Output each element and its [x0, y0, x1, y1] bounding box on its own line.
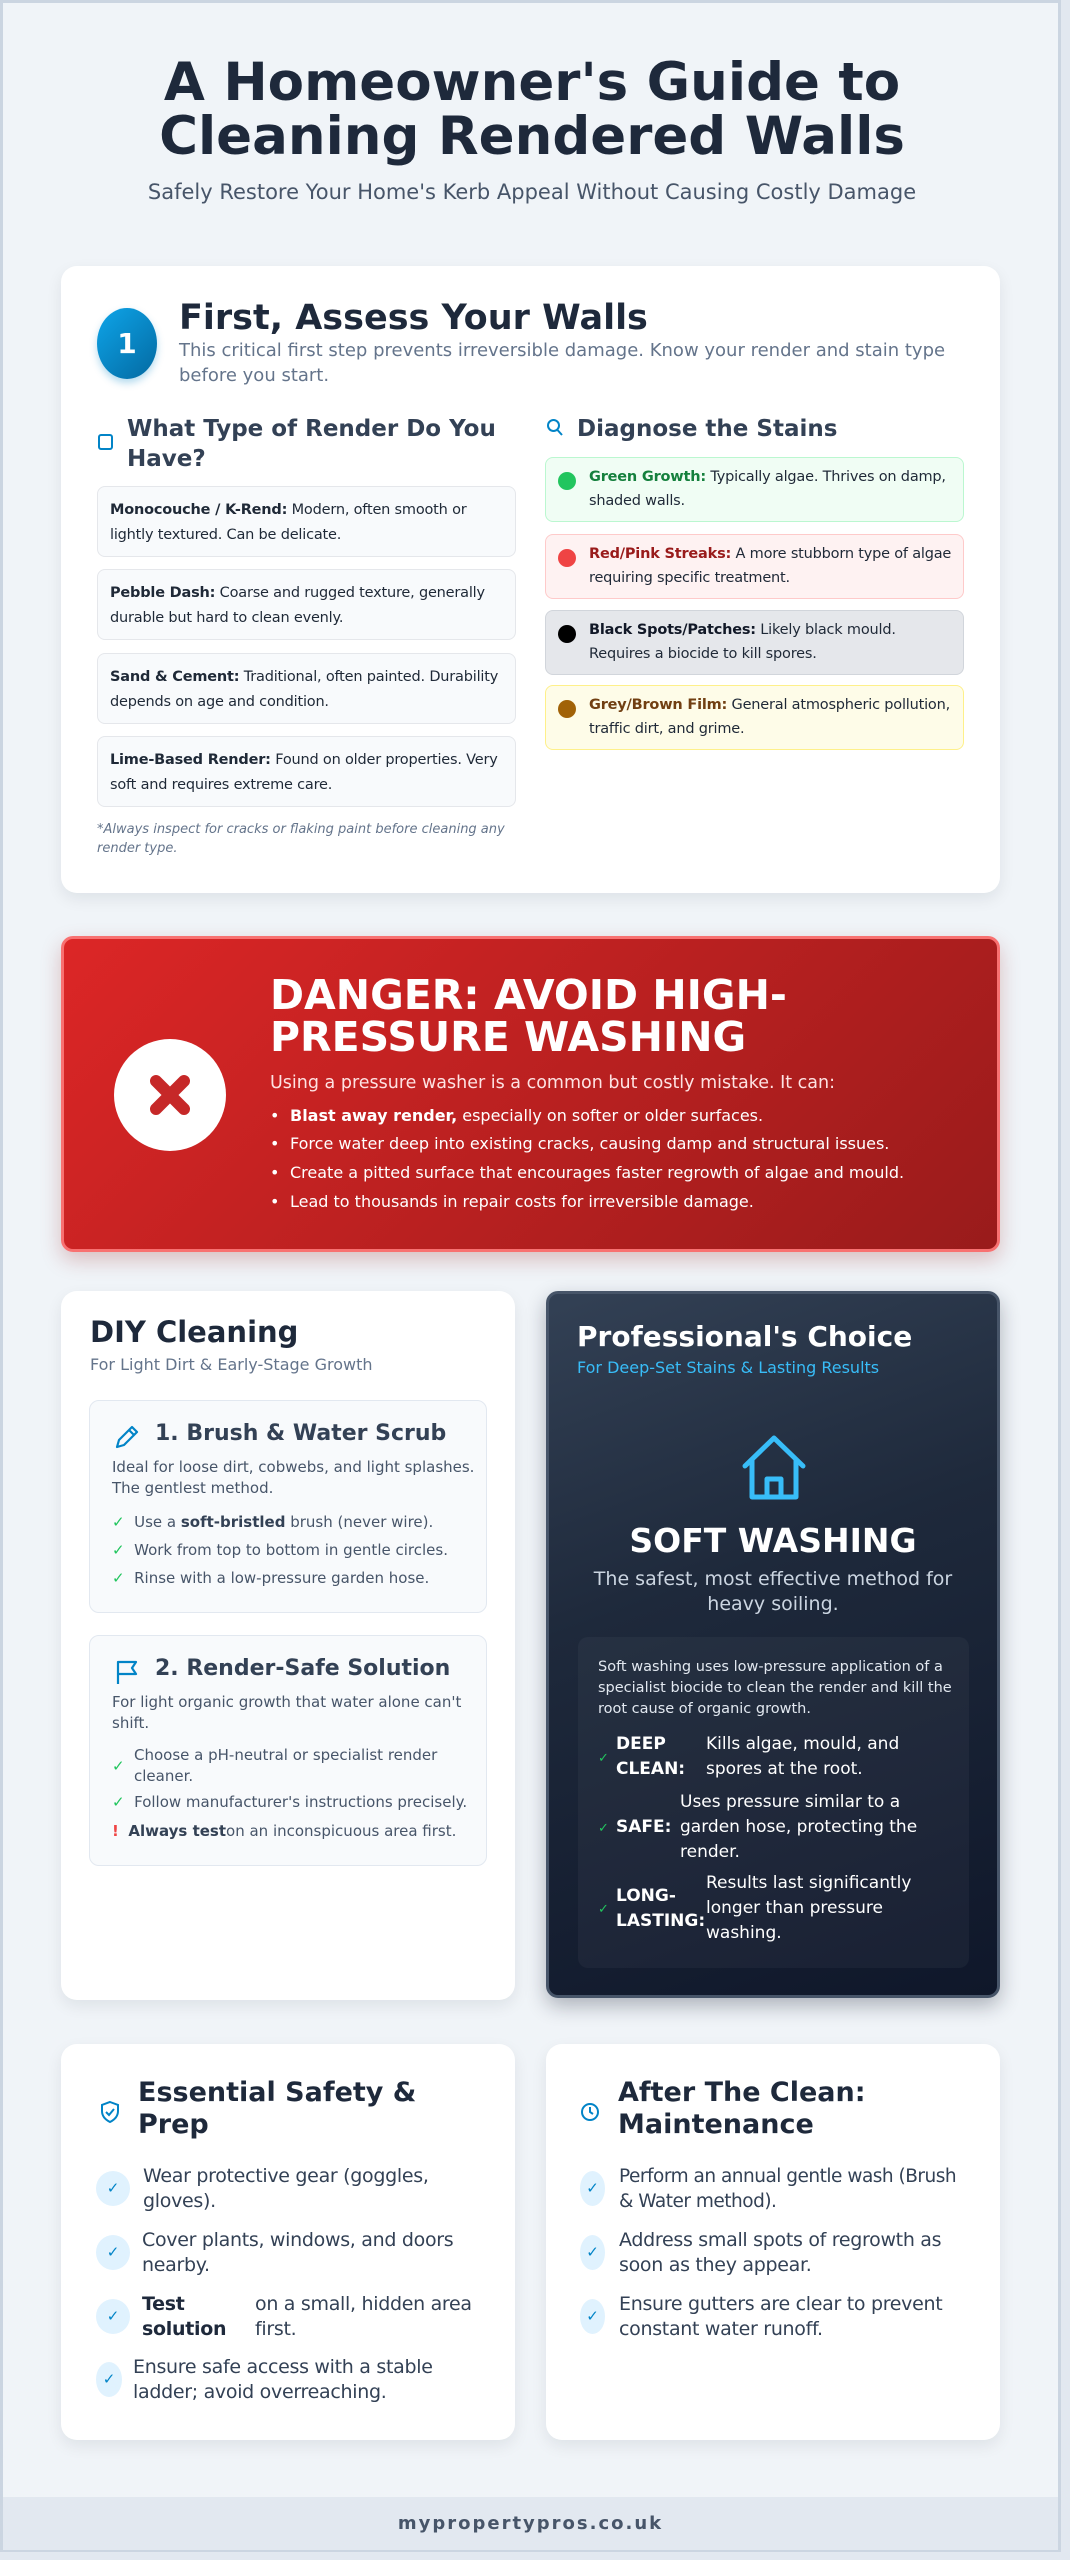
danger list: • — [270, 1106, 279, 1125]
heading: render types: What Type of Render Do You Have? — [127, 416, 496, 472]
stain: red — [545, 534, 964, 599]
method 1 box: ✓ Rinse with a low-pressure garden hose. — [112, 1569, 429, 1587]
icon: flag — [116, 1660, 138, 1684]
danger list: Blast away render, especially on softer or older surfaces. — [290, 1106, 763, 1125]
feature: deep clean — [598, 1734, 899, 1779]
icon: clock — [581, 2103, 599, 2121]
method 2 title: 2. Render-Safe Solution — [155, 1656, 450, 1681]
stain: green — [545, 457, 964, 522]
danger list — [270, 1106, 904, 1211]
render: monocouche — [97, 486, 516, 557]
feature: long lasting: LASTING: — [616, 1911, 705, 1931]
panel: professional — [546, 1291, 1000, 1998]
feature: long lasting: ✓ — [598, 1902, 609, 1917]
icon: magnifier — [547, 419, 563, 436]
section heading: First, Assess Your Walls — [179, 298, 648, 338]
stain: brown — [545, 685, 964, 750]
method 1 title: 1. Brush & Water Scrub — [155, 1421, 446, 1446]
icon: render — [98, 434, 113, 450]
render: sand cement: Sand & Cement: Traditional, often painted. Durability depends on age and condition. — [110, 669, 498, 710]
panel: danger — [61, 936, 1000, 1252]
method 2 box — [89, 1635, 487, 1866]
feature: long lasting: Results last significantly longer than pressure washing. — [706, 1873, 911, 1943]
method 1 box: ✓ Use a soft-bristled brush (never wire). — [112, 1513, 433, 1531]
icon: x circle — [114, 1039, 226, 1151]
panel: maintenance: ✓ — [586, 2243, 599, 2261]
render: sand cement — [97, 653, 516, 724]
feature: safe: Uses pressure similar to a garden hose, protecting the render. — [680, 1792, 917, 1862]
stain: black — [545, 610, 964, 675]
method 2 box: ✓ Follow manufacturer's instructions precisely. — [112, 1793, 467, 1811]
panel: safety: ✓ — [107, 2243, 119, 2261]
pro heading: Professional's Choice — [577, 1320, 912, 1353]
method 1 desc: Ideal for loose dirt, cobwebs, and light splashes. The gentlest method. — [112, 1458, 474, 1497]
method 2 desc: For light organic growth that water alone can't shift. — [112, 1693, 461, 1732]
panel: maintenance: Perform an annual gentle wash (Brush — [619, 2166, 956, 2187]
feature: deep clean: CLEAN: — [616, 1759, 685, 1779]
panel: safety: on a small, hidden area first. — [255, 2293, 472, 2340]
danger intro: Using a pressure washer is a common but costly mistake. It can: — [270, 1073, 835, 1093]
stain: green: Green Growth: Typically algae. Thrives on damp, shaded walls. — [589, 469, 946, 509]
panel: DIY cleaning — [61, 1291, 515, 2000]
danger list: Lead to thousands in repair costs for irreversible damage. — [290, 1192, 754, 1211]
icon: house — [742, 1436, 806, 1500]
maintenance items — [580, 2171, 605, 2206]
maintenance heading: After The Clean: Maintenance — [618, 2077, 866, 2140]
panel: maintenance: Ensure gutters are clear to prevent constant water runoff. — [619, 2293, 942, 2340]
render: lime — [97, 736, 516, 807]
panel: safety: Test solution — [142, 2293, 226, 2340]
icon: pencil — [116, 1426, 138, 1448]
feature: deep clean: ✓ — [598, 1751, 609, 1766]
danger heading: DANGER: AVOID HIGH- — [270, 971, 787, 1019]
feature: long lasting: LONG- — [616, 1886, 676, 1906]
panel: assess walls — [61, 266, 1000, 893]
render: pebble dash: Pebble Dash: Coarse and rugged texture, generally durable but hard to clean evenly. — [110, 585, 485, 626]
panel: safety: Cover plants, windows, and doors nearby. — [142, 2229, 453, 2276]
section intro: This critical first step prevents irreversible damage. Know your render and stain type before you start. — [179, 340, 945, 386]
footer: mypropertypros.co.uk — [398, 2513, 663, 2534]
feature: deep clean: Kills algae, mould, and spores at the root. — [706, 1734, 899, 1779]
safety items — [96, 2171, 130, 2206]
stain: black: Black Spots/Patches: Likely black mould. Requires a biocide to kill spores. — [589, 622, 896, 662]
feature: safe: ✓ — [598, 1821, 609, 1836]
panel: safety: ✓ — [103, 2370, 115, 2388]
subtitle: Safely Restore Your Home's Kerb Appeal Without Causing Costly Damage — [148, 180, 916, 204]
render: pebble dash — [97, 569, 516, 640]
method 2 box: ✓ — [112, 1757, 125, 1775]
method 2 box: Choose a pH-neutral or specialist render cleaner. — [134, 1746, 437, 1785]
danger list: • — [270, 1163, 279, 1182]
danger list: • — [270, 1192, 279, 1211]
DIY heading: DIY Cleaning — [90, 1315, 298, 1349]
DIY subtitle: For Light Dirt & Early-Stage Growth — [90, 1355, 372, 1374]
safety heading: Essential Safety & Prep — [138, 2077, 416, 2140]
footnote: *Always inspect for cracks or flaking paint before cleaning any render type. — [97, 822, 505, 856]
method 1 box: ✓ Work from top to bottom in gentle circles. — [112, 1541, 448, 1559]
info box — [578, 1637, 969, 1968]
icon: number badge: 1 — [117, 327, 137, 360]
icon: number badge — [97, 308, 157, 379]
render: monocouche: Monocouche / K-Rend: Modern, often smooth or lightly textured. Can be delicate. — [110, 502, 466, 543]
method 1 box — [89, 1400, 487, 1613]
heading: stains: Diagnose the Stains — [577, 416, 837, 442]
feature: long lasting — [598, 1873, 911, 1943]
panel: safety: Ensure safe access with a stable ladder; avoid overreaching. — [133, 2356, 433, 2403]
panel: maintenance: & Water method). — [619, 2191, 776, 2212]
title: A Homeowner's Guide to — [164, 52, 900, 113]
panel: safety: ✓ — [107, 2307, 119, 2325]
danger list: • — [270, 1134, 279, 1153]
soft washing heading: SOFT WASHING — [629, 1521, 917, 1560]
render: lime: Lime-Based Render: Found on older properties. Very soft and requires extreme care. — [110, 752, 498, 793]
pro subtitle: For Deep-Set Stains & Lasting Results — [577, 1358, 879, 1377]
danger heading: PRESSURE WASHING — [270, 1013, 746, 1061]
danger list: Force water deep into existing cracks, causing damp and structural issues. — [290, 1134, 889, 1153]
danger list: Create a pitted surface that encourages faster regrowth of algae and mould. — [290, 1163, 904, 1182]
stain: brown: Grey/Brown Film: General atmospheric pollution, traffic dirt, and grime. — [589, 697, 950, 737]
panel: maintenance: ✓ — [586, 2307, 599, 2325]
feature: deep clean: DEEP — [616, 1734, 666, 1754]
title: Cleaning Rendered Walls — [159, 106, 905, 167]
title — [159, 52, 905, 167]
info text: Soft washing uses low-pressure application of a specialist biocide to clean the render and kill the root cause of organic growth. — [598, 1659, 952, 1717]
maintenance items: ✓ — [586, 2179, 599, 2197]
panel: safety: Wear protective gear (goggles, gloves). — [143, 2165, 429, 2212]
icon: shield — [101, 2100, 119, 2124]
stain: red: Red/Pink Streaks: A more stubborn type of algae requiring specific treatment. — [589, 546, 951, 586]
feature: safe: SAFE: — [616, 1817, 671, 1837]
panel: safety — [61, 2044, 515, 2440]
panel: maintenance — [546, 2044, 1000, 2440]
safety items: ✓ — [107, 2179, 119, 2197]
footer — [3, 2497, 1058, 2550]
soft washing tagline: The safest, most effective method for heavy soiling. — [594, 1568, 952, 1615]
method 2 box: ! Always teston an inconspicuous area first. — [112, 1822, 456, 1840]
panel: maintenance: Address small spots of regrowth as soon as they appear. — [619, 2229, 941, 2276]
danger heading — [270, 971, 787, 1061]
